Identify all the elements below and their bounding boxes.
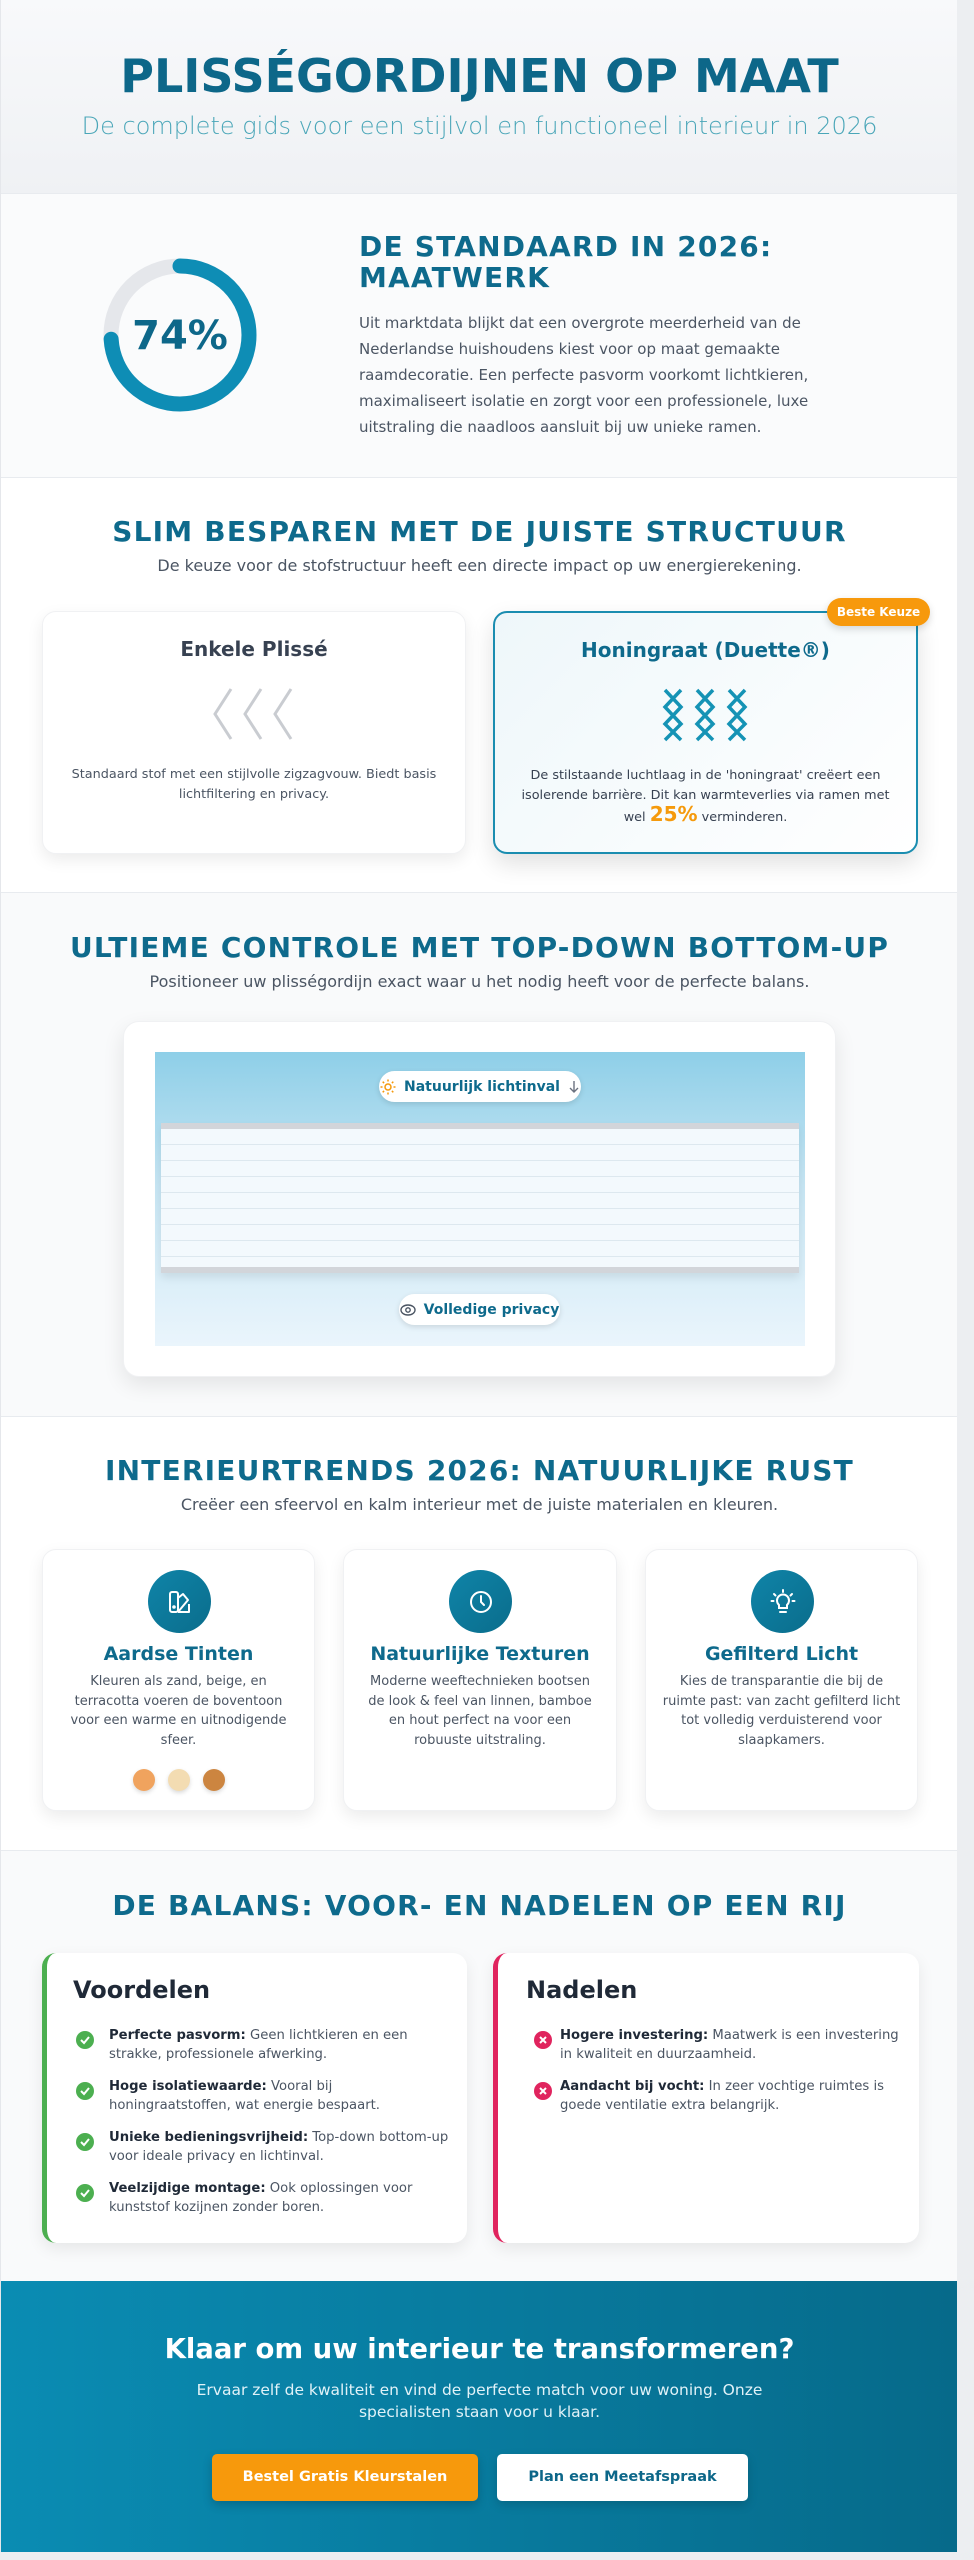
pro items: Perfecte pasvorm: Geen lichtkieren en een strakke, professionele afwerking.: [109, 2028, 408, 2062]
card: gefilterd licht: Kies de transparantie die bij de ruimte past: van zacht gefilterd licht tot volledig verduisterend voor slaapkamers.: [663, 1674, 900, 1748]
icon: zigzag: [213, 688, 292, 740]
heading: MAATWERK: [359, 261, 550, 294]
con items: Aandacht bij vocht: In zeer vochtige ruimtes is goede ventilatie extra belangrijk.: [560, 2079, 884, 2113]
window: [155, 1052, 805, 1346]
card: natuurlijke texturen: [343, 1549, 617, 1811]
panel: nadelen: Nadelen: [526, 1976, 637, 2004]
blind: [161, 1123, 799, 1273]
con items: [534, 2028, 899, 2113]
button: kleurstalen: [212, 2454, 478, 2501]
panel: nadelen: [493, 1953, 919, 2243]
CTA text: Ervaar zelf de kwaliteit en vind de perfecte match voor uw woning. Onze specialisten staan voor u klaar.: [197, 2381, 762, 2421]
card: aardse tinten: Kleuren als zand, beige, en terracotta voeren de boventoon voor een warme en uitnodigende sfeer.: [70, 1674, 287, 1748]
heading: ULTIEME CONTROLE MET TOP-DOWN BOTTOM-UP: [70, 931, 889, 964]
section: slim besparen: [1, 478, 958, 893]
panel: voordelen: [42, 1953, 467, 2243]
pro items: Hoge isolatiewaarde: Vooral bij honingraatstoffen, wat energie bespaart.: [109, 2079, 380, 2113]
button: meetafspraak: [497, 2454, 748, 2501]
donut chart 74%: [104, 258, 256, 412]
button: meetafspraak: Plan een Meetafspraak: [528, 2469, 717, 2485]
pill: volledige privacy: [399, 1294, 560, 1325]
color swatches: [132, 1769, 226, 1794]
heading: SLIM BESPAREN MET DE JUISTE STRUCTUUR: [112, 515, 847, 548]
heading: INTERIEURTRENDS 2026: NATUURLIJKE RUST: [105, 1454, 854, 1487]
heading: DE BALANS: VOOR- EN NADELEN OP EEN RIJ: [112, 1889, 847, 1922]
title: PLISSÉGORDIJNEN OP MAAT: [120, 49, 839, 103]
card: honingraat: De stilstaande luchtlaag in de 'honingraat' creëert een isolerende barrière. Dit kan warmteverlies via ramen met wel 25% verminderen.: [521, 768, 890, 826]
header: [1, 0, 958, 194]
icon: honeycomb: [662, 688, 748, 742]
card: natuurlijke texturen: Natuurlijke Texturen: [370, 1643, 590, 1665]
icon: light bulb: [751, 1570, 814, 1633]
heading: DE STANDAARD IN 2026:: [359, 230, 772, 263]
card: enkele plissé: [42, 611, 466, 854]
icon: clock: [449, 1570, 512, 1633]
subtitle: Creëer een sfeervol en kalm interieur met de juiste materialen en kleuren.: [181, 1495, 778, 1514]
pill: natuurlijk lichtinval: Natuurlijk lichtinval: [404, 1078, 560, 1094]
card: natuurlijke texturen: Moderne weeftechnieken bootsen de look & feel van linnen, bamboe en hout perfect na voor een robuuste uitstraling.: [368, 1674, 592, 1748]
card: aardse tinten: [42, 1549, 315, 1811]
CTA heading: Klaar om uw interieur te transformeren?: [165, 2333, 794, 2365]
subtitle: De complete gids voor een stijlvol en functioneel interieur in 2026: [82, 112, 877, 140]
pro items: [76, 2028, 448, 2215]
section: voor- en nadelen: [1, 1851, 958, 2281]
card: enkele plissé: Standaard stof met een stijlvolle zigzagvouw. Biedt basis lichtfiltering en privacy.: [72, 767, 436, 802]
card: honingraat: Honingraat (Duette®): [581, 638, 830, 662]
donut chart 74%: 74%: [132, 313, 228, 359]
icon: palette: [148, 1570, 211, 1633]
paragraph: Uit marktdata blijkt dat een overgrote meerderheid van de Nederlandse huishoudens kiest voor op maat gemaakte raamdecoratie. Een perfecte pasvorm voorkomt lichtkieren, maximaliseert isolatie en zorgt voor een professionele, luxe uitstraling die naadloos aansluit bij uw unieke ramen.: [359, 314, 808, 436]
card: aardse tinten: Aardse Tinten: [104, 1643, 253, 1665]
panel: voordelen: Voordelen: [73, 1976, 210, 2004]
section: top-down bottom-up: [1, 893, 958, 1417]
section: standaard 2026: [1, 194, 958, 478]
subtitle: Positioneer uw plisségordijn exact waar u het nodig heeft voor de perfecte balans.: [150, 972, 809, 991]
badge: beste keuze: [827, 598, 930, 626]
pro items: Unieke bedieningsvrijheid: Top-down bottom-up voor ideale privacy en lichtinval.: [109, 2130, 448, 2164]
badge: beste keuze: Beste Keuze: [837, 605, 920, 619]
pill: volledige privacy: Volledige privacy: [424, 1302, 559, 1318]
pill: natuurlijk lichtinval: [379, 1071, 581, 1102]
card: gefilterd licht: [645, 1549, 918, 1811]
section: interieurtrends: [1, 1417, 958, 1851]
pro items: Veelzijdige montage: Ook oplossingen voor kunststof kozijnen zonder boren.: [109, 2181, 412, 2215]
card: honingraat: [493, 611, 918, 854]
subtitle: De keuze voor de stofstructuur heeft een directe impact op uw energierekening.: [157, 556, 802, 575]
con items: Hogere investering: Maatwerk is een investering in kwaliteit en duurzaamheid.: [560, 2028, 899, 2062]
window illustration card: [123, 1021, 836, 1377]
CTA section: [1, 2281, 958, 2552]
card: gefilterd licht: Gefilterd Licht: [705, 1643, 858, 1665]
button: kleurstalen: Bestel Gratis Kleurstalen: [243, 2469, 447, 2485]
heading: [359, 230, 772, 294]
card: enkele plissé: Enkele Plissé: [180, 637, 328, 661]
